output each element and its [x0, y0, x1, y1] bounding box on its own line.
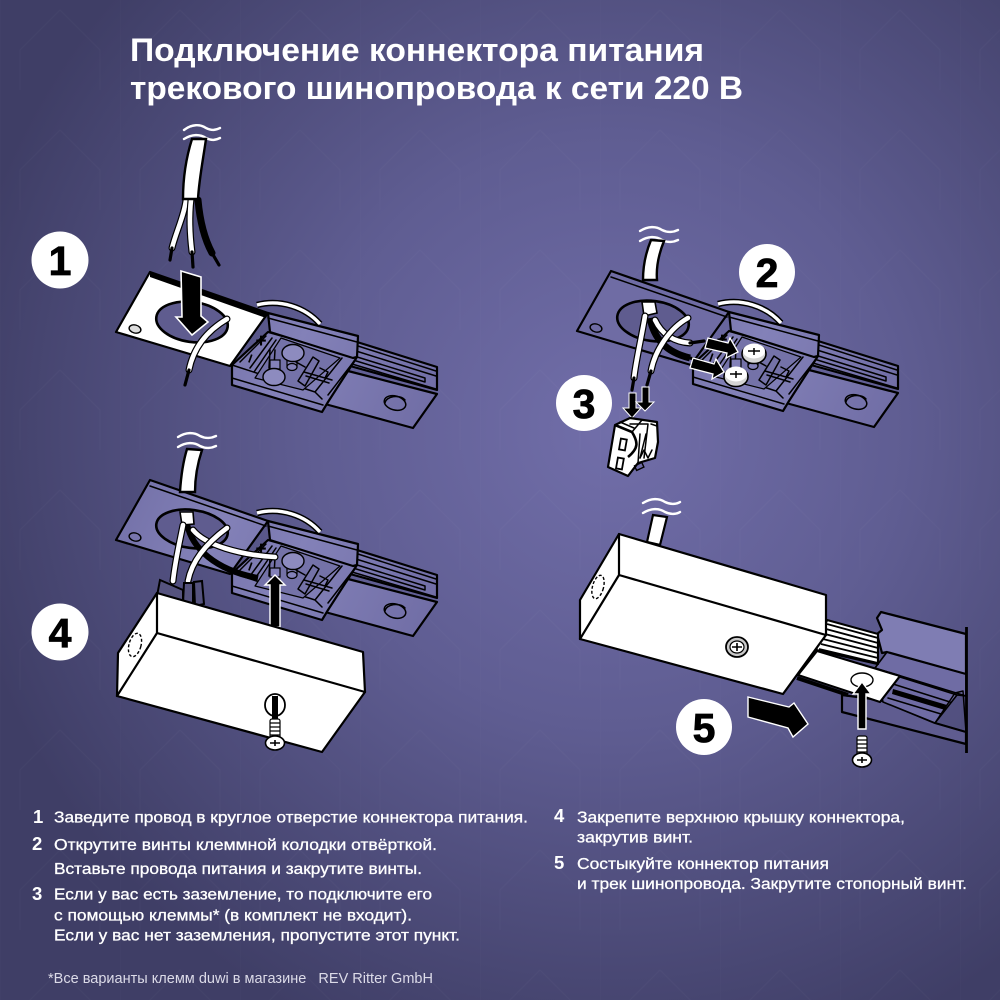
wire through hole: [185, 319, 227, 385]
title: [130, 32, 743, 106]
step 5 text: 5: [554, 852, 564, 873]
step 3 text: Если у вас есть заземление, то подключите его: [54, 886, 432, 904]
badge 3: 3: [573, 381, 595, 427]
step 4 illustration: [116, 433, 437, 752]
arrow: down into hole: [176, 271, 208, 335]
step 5 text: [554, 852, 967, 893]
wago terminal: [608, 418, 658, 476]
step 2 illustration: [577, 227, 898, 476]
step 2 text: Открутите винты клеммной колодки отвёрткой.: [54, 837, 437, 854]
arrows to screws: [690, 338, 738, 379]
badge 4: [32, 604, 88, 660]
terminal screw: [282, 552, 304, 570]
step 1 illustration: [116, 125, 437, 428]
step 1 text: 1: [33, 806, 43, 827]
wall-mounted track: [842, 612, 966, 753]
cable: [643, 499, 680, 545]
step 1 text: Заведите провод в круглое отверстие коннектора питания.: [54, 810, 528, 826]
step 4 text: 4: [554, 805, 565, 826]
badge 5: 5: [693, 705, 715, 751]
step 5 text: Состыкуйте коннектор питания: [577, 856, 829, 873]
connector body: [693, 302, 898, 427]
screw: [852, 736, 872, 767]
terminal screws: [263, 344, 304, 386]
end plate: [797, 651, 900, 702]
cable with stripped wires: [170, 125, 220, 267]
connector body: [232, 511, 437, 636]
wago terminal: [157, 580, 204, 606]
step 2 text: [32, 833, 437, 878]
badge 1: 1: [49, 238, 71, 284]
mounting plate: [116, 480, 268, 574]
arrow up to plate: [853, 682, 871, 729]
cable: [640, 227, 678, 316]
mounting plate: [116, 272, 268, 366]
step 4 text: закрутив винт.: [577, 830, 693, 846]
step 4 text: [554, 805, 905, 846]
step 3 text: с помощью клеммы* (в комплект не входит).: [54, 908, 412, 924]
wires: [632, 316, 704, 390]
step 5 illustration: [580, 499, 966, 767]
badge 5: [676, 699, 732, 755]
screws: [724, 344, 766, 386]
title: Подключение коннектора питания: [130, 32, 704, 68]
step 3 text: 3: [32, 883, 42, 904]
instructions right column: [554, 805, 967, 893]
badge 3: [556, 375, 612, 431]
cover box: [580, 534, 826, 694]
rails: [816, 620, 878, 664]
footnote: *Все варианты клемм duwi в магазине REV Ritter GmbH: [48, 970, 433, 987]
step 3 text: Если у вас нет заземления, пропустите этот пункт.: [54, 928, 460, 944]
step 2 text: Вставьте провода питания и закрутите винты.: [54, 861, 422, 878]
cable and wires: [173, 433, 275, 581]
connector body: [232, 303, 437, 428]
step 4 text: Закрепите верхнюю крышку коннектора,: [577, 810, 905, 826]
cover box: [117, 593, 365, 752]
badge 1: [32, 232, 88, 288]
title: трекового шинопровода к сети 220 В: [130, 70, 743, 106]
arrows to terminal: [623, 387, 654, 418]
instructions left column: [32, 806, 528, 944]
arrow right: [748, 697, 808, 737]
badge 2: 2: [756, 250, 778, 296]
step 2 text: 2: [32, 833, 42, 854]
badge 2: [739, 244, 795, 300]
arrow up: [265, 575, 285, 627]
screw: [265, 694, 285, 750]
badge 4: 4: [49, 610, 72, 656]
mounting plate: [577, 271, 729, 365]
step 5 text: и трек шинопровода. Закрутите стопорный винт.: [577, 876, 967, 893]
step 3 text: [32, 883, 460, 944]
